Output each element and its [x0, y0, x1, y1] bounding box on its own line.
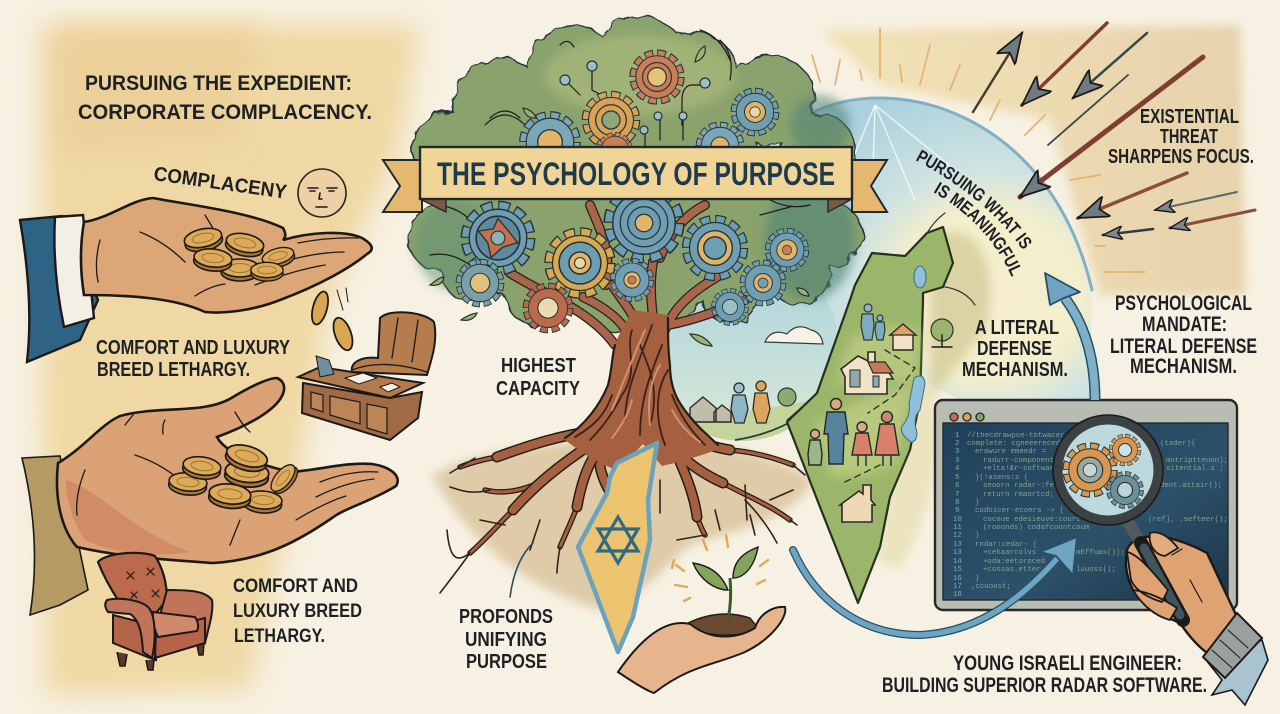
- code lines: 13: [953, 549, 962, 557]
- seat cushion: [153, 612, 198, 637]
- caption: comfort and luxury breed lethargy lower: LETHARGY.: [234, 626, 325, 647]
- left arm: [105, 599, 155, 658]
- chair legs and shadow: [117, 643, 204, 670]
- code lines: 16: [953, 575, 962, 583]
- caption: profound unifying purpose: UNIFYING: [465, 629, 547, 651]
- leaves: [430, 46, 809, 346]
- map of land with families: [787, 213, 975, 603]
- gear: top orange: [633, 53, 681, 101]
- sleeve: [1206, 640, 1268, 705]
- spear pointing up: [973, 33, 1022, 112]
- caption: young israeli engineer: YOUNG ISRAELI ENGINEER:: [953, 652, 1182, 675]
- gear: far right blue: [768, 231, 806, 269]
- thumb: [1150, 532, 1178, 556]
- small tree: [931, 319, 953, 347]
- caption: highest capacity: [496, 355, 581, 400]
- right arm: [160, 590, 212, 643]
- caption: psychological mandate: [1110, 292, 1257, 378]
- caption: existential threat: THREAT: [1160, 126, 1218, 148]
- curved label: pursuing what is meaningful: IS MEANINGFUL: [934, 182, 1020, 277]
- code lines: }: [975, 575, 979, 583]
- caption: psychological mandate: MANDATE:: [1142, 313, 1227, 336]
- sleeve: navy suit: [20, 216, 98, 362]
- arrow 6: [1078, 173, 1187, 218]
- protective dome: [760, 98, 1092, 400]
- cupped hand: [618, 607, 785, 693]
- palm: [1126, 536, 1237, 655]
- canopy foliage: [409, 18, 862, 335]
- window buttons: [950, 413, 984, 421]
- hand palm up lower: [57, 378, 398, 563]
- gear: right blue: [686, 219, 744, 277]
- icon: bored face: [298, 169, 346, 217]
- sleeve: tan suit: [22, 456, 88, 615]
- arrow 9: [1103, 229, 1153, 235]
- falling coins: [309, 288, 356, 353]
- gear: inner blue: [613, 261, 651, 299]
- code lines: radurr-component: [983, 457, 1054, 465]
- lakes: [914, 266, 926, 288]
- circuit traces: [430, 30, 810, 265]
- code lines: rndar:cedar- {: [975, 541, 1037, 549]
- code window: [935, 400, 1237, 610]
- caption: existential threat: EXISTENTIAL: [1140, 106, 1239, 128]
- coins in upper hand: [183, 225, 296, 281]
- distant houses: [690, 397, 731, 422]
- caption: comfort and luxury breed lethargy: BREED LETHARGY.: [97, 359, 250, 381]
- code lines: (rooonds) codafcoontcoum: [983, 524, 1090, 532]
- code lines: erawure emeedr =: [975, 448, 1047, 456]
- star of david: [598, 517, 638, 563]
- office chair: [352, 312, 435, 375]
- title text: pursuing the expedient: CORPORATE COMPLACENCY.: [78, 101, 372, 124]
- gear: top right blue: [734, 91, 776, 133]
- thin roots: [440, 458, 805, 593]
- green strip: [787, 393, 822, 428]
- code lines: }(!asens:s {: [975, 474, 1028, 482]
- code lines: seoorn radar-:fe: [983, 482, 1054, 490]
- small house: [890, 324, 916, 350]
- gear: large center blue: [609, 188, 679, 258]
- chair base: [113, 615, 205, 660]
- gear: large left blue: [466, 206, 530, 270]
- coins in lower hand: [168, 441, 302, 514]
- illustration: executive desk and chair: [298, 312, 435, 440]
- hand with sprout: [618, 535, 785, 693]
- caption: comfort and luxury breed lethargy: [96, 337, 291, 381]
- map with star of david: [578, 443, 657, 652]
- lower hand with coins: [22, 378, 398, 615]
- code lines: dent.attair();: [1160, 482, 1222, 490]
- chair back: [98, 553, 167, 620]
- gear: top mid yellow: [586, 95, 636, 145]
- code lines: (ref], .sefteer();: [1148, 516, 1228, 524]
- code lines: }: [975, 532, 979, 540]
- code lines: sitential.s ;: [1166, 465, 1224, 473]
- code lines: codoicer-ecoers -> {: [975, 507, 1064, 515]
- cuff: white shirt: [54, 215, 94, 327]
- tree canopy with gears: [409, 18, 862, 346]
- caption: profound unifying purpose: [459, 543, 553, 673]
- title banner: [383, 147, 887, 212]
- bark strands: [575, 325, 705, 445]
- gear: mid right blue: [699, 125, 741, 167]
- upper couple: [861, 304, 885, 340]
- trunk: [565, 310, 722, 470]
- reddish palm shading: [66, 480, 190, 554]
- code lines: 10: [953, 516, 962, 524]
- code lines: 11: [953, 524, 962, 532]
- caption: highest capacity: CAPACITY: [496, 378, 581, 400]
- code lines: ,ccuoost;: [971, 583, 1011, 591]
- code lines: 6: [955, 482, 959, 490]
- code lines: mEffuas());: [1076, 549, 1125, 557]
- gear: lower red: [526, 286, 570, 330]
- code lines: complete: cgneeereceds(: [967, 440, 1069, 448]
- soil: [688, 614, 758, 635]
- title: THE PSYCHOLOGY OF PURPOSE: [437, 156, 835, 192]
- distant couple: [731, 381, 770, 423]
- desk top: [298, 367, 423, 398]
- blue arrow: engineer to meaningful: [1045, 273, 1095, 400]
- code lines: 18: [953, 591, 962, 599]
- fingers: [1127, 552, 1177, 620]
- code lines: 14: [953, 558, 962, 566]
- title text: pursuing the expedient: PURSUING THE EXPEDIENT:: [85, 72, 352, 95]
- caption: profound unifying purpose: PURPOSE: [466, 651, 547, 673]
- cloud: [765, 327, 823, 344]
- hand shading: [96, 215, 358, 296]
- sprout: [693, 547, 758, 620]
- upper hand with coins: [20, 198, 372, 362]
- caption: a literal defense mechanism: [962, 317, 1068, 381]
- caption: a literal defense mechanism: A LITERAL: [975, 317, 1059, 339]
- caption: comfort and luxury breed lethargy lower: COMFORT AND: [233, 576, 358, 597]
- code lines: (tader){: [1160, 440, 1195, 448]
- gear: mid left blue: [523, 115, 577, 169]
- threat arrows: [973, 23, 1255, 235]
- sky circle with distant family: [669, 294, 837, 441]
- label: complacency: COMPLACENY: [152, 163, 289, 204]
- hand palm up: [81, 198, 372, 312]
- arrow big: [1020, 57, 1203, 197]
- gear: muted left: [459, 262, 501, 304]
- branches: [510, 205, 745, 345]
- arrow 3: [1073, 33, 1147, 98]
- code lines: //thecdrawpoe-totwacer: [967, 432, 1065, 440]
- code lines: }: [975, 499, 979, 507]
- code lines: 9: [955, 507, 959, 515]
- trunk and roots: [440, 310, 805, 593]
- caption: a literal defense mechanism: DEFENSE: [977, 338, 1052, 360]
- code lines: 12: [953, 532, 962, 540]
- caption: psychological mandate: MECHANISM.: [1130, 355, 1237, 378]
- code lines: cocoue edesieuve:courc: [983, 516, 1081, 524]
- code lines: 17: [953, 583, 962, 591]
- illustration: armchair: [98, 553, 212, 670]
- code lines: 2: [955, 440, 959, 448]
- large house: [841, 352, 893, 394]
- curved label: pursuing what is meaningful: PURSUING WHAT IS: [916, 150, 1032, 248]
- arrow 2: [1022, 23, 1107, 105]
- code lines: +elta!&r-software: [983, 465, 1058, 473]
- caption: comfort and luxury breed lethargy lower: [233, 576, 362, 647]
- code lines: luuoss();: [1076, 566, 1116, 574]
- arrow 7: [1155, 192, 1237, 210]
- wristwatch: [1203, 613, 1262, 678]
- gear: partly hidden orange: [600, 135, 630, 165]
- canopy shading: [545, 35, 735, 115]
- caption: highest capacity: HIGHEST: [501, 355, 576, 377]
- trunk edges: [565, 318, 718, 445]
- code lines: 3: [955, 457, 959, 465]
- caption: comfort and luxury breed lethargy lower: LUXURY BREED: [233, 601, 362, 622]
- gear: small bottom blue: [714, 291, 746, 323]
- banner tails: [383, 160, 422, 212]
- gear: yellow: [549, 232, 611, 294]
- soft lower roots: [460, 450, 793, 553]
- blue arrow: land to engineer: [793, 537, 1077, 635]
- code lines: 5: [955, 474, 959, 482]
- title text: pursuing the expedient: [78, 72, 372, 124]
- code lines: 15: [953, 566, 962, 574]
- code lines: +cekaarcolvs: [983, 549, 1036, 557]
- code lines: 13: [953, 541, 962, 549]
- code lines: 3: [955, 448, 959, 456]
- magnifier lens: [1058, 420, 1158, 520]
- caption: profound unifying purpose: PROFONDS: [459, 606, 553, 628]
- family of four: [808, 398, 899, 466]
- caption: comfort and luxury breed lethargy: COMFORT AND LUXURY: [96, 337, 291, 359]
- magnifier handle: [1128, 522, 1142, 545]
- thick roots: [497, 430, 730, 517]
- gear: lower right blue: [743, 263, 783, 303]
- engineer hand with magnifier: [1053, 415, 1268, 705]
- code lines: 7: [955, 491, 959, 499]
- code lines: mutriptteuon);: [1166, 457, 1228, 465]
- code lines: +oda:eetoroced: [983, 558, 1045, 566]
- caption: a literal defense mechanism: MECHANISM.: [962, 359, 1068, 381]
- arrow 8: [1170, 210, 1255, 228]
- arrow 4: [1048, 75, 1128, 145]
- code lines: 8: [955, 499, 959, 507]
- lower house: [840, 485, 875, 522]
- desk body: [302, 383, 422, 440]
- caption: existential threat: [1108, 106, 1254, 168]
- code lines: +cossas.etter: [983, 566, 1041, 574]
- sun rays: [812, 28, 1145, 272]
- banner body: [420, 147, 852, 199]
- code lines: [953, 432, 1228, 599]
- code lines: 4: [955, 465, 960, 473]
- caption: young israeli engineer: [882, 652, 1207, 697]
- code lines: 1: [955, 432, 960, 440]
- lens gears: [1066, 446, 1114, 494]
- code lines: return rmaortcd;: [983, 491, 1054, 499]
